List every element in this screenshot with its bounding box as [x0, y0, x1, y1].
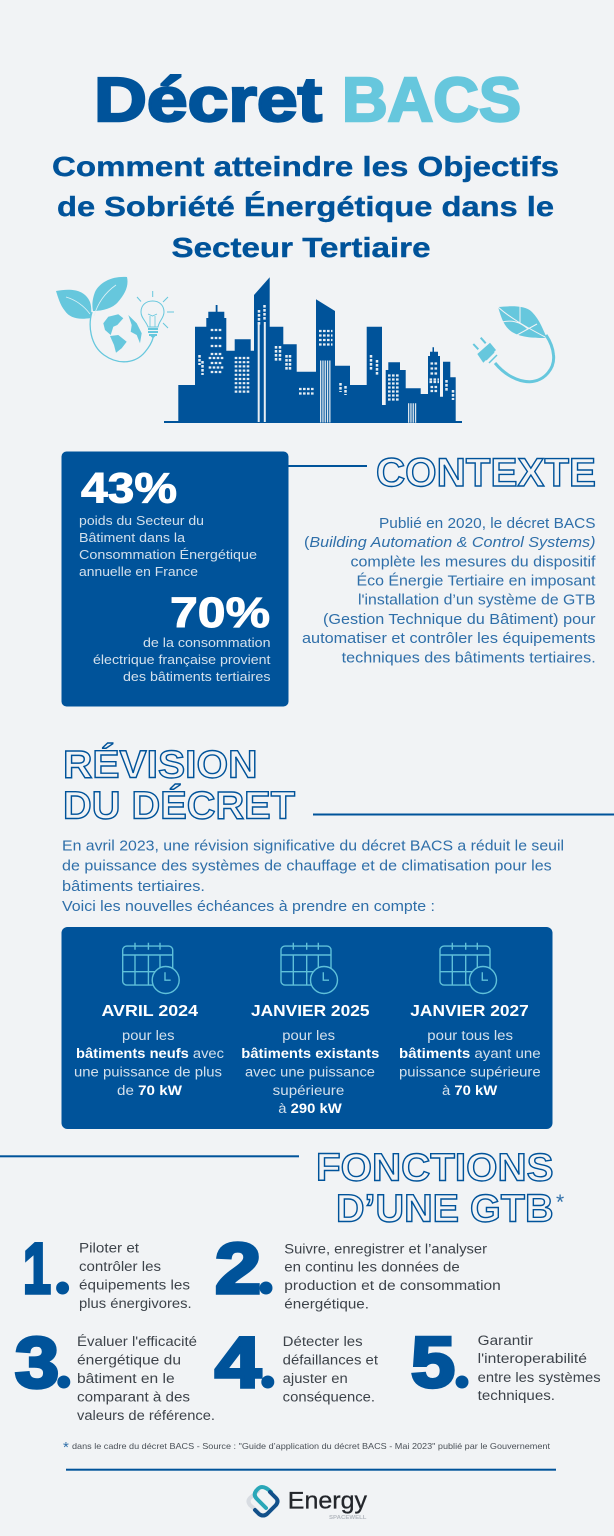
- item 4: 4: [215, 1324, 262, 1403]
- item 4: ajuster en: [283, 1371, 348, 1386]
- heading: révision du décret: RÉVISION: [63, 743, 258, 787]
- item 4: Détecter les: [283, 1334, 363, 1349]
- footnote: dans le cadre du décret BACS - Source : "Guide d’application du décret BACS - Mai 2023" publié par le Gouvernement: [72, 1441, 551, 1451]
- item 1: contrôler les: [79, 1259, 161, 1274]
- item 3: valeurs de référence.: [77, 1408, 215, 1423]
- asterisk: *: [556, 1191, 564, 1214]
- text: janvier 2025 details: pour les: [282, 1028, 335, 1043]
- icon: plug with leaf: [473, 306, 554, 382]
- item 2: en continu les données de: [284, 1260, 460, 1275]
- icon: calendar with clock: [281, 943, 338, 994]
- text: janvier 2027 details: puissance supérieure: [399, 1064, 541, 1080]
- item 5: [411, 1324, 601, 1403]
- column: janvier 2025: [241, 943, 379, 1116]
- text: 43% description: Consommation Énergétique: [79, 547, 257, 562]
- subtitle: Comment atteindre les Objectifs: [52, 151, 559, 182]
- item 1: 1: [23, 1230, 51, 1309]
- icon: calendar with clock: [123, 943, 179, 994]
- text: contexte paragraph: automatiser et contrôler les équipements: [302, 631, 596, 647]
- stat: 70%: 70%: [170, 589, 270, 637]
- item 4: conséquence.: [283, 1390, 375, 1405]
- footnote: *: [63, 1439, 69, 1456]
- item 5: entre les systèmes: [478, 1370, 601, 1385]
- text: contexte paragraph: Éco Énergie Tertiaire en imposant: [356, 572, 596, 589]
- text: contexte paragraph: complète les mesures du dispositif: [350, 554, 597, 570]
- text: avril 2024 details: bâtiments neufs avec: [76, 1046, 224, 1061]
- text: janvier 2027 details: bâtiments ayant une: [399, 1046, 541, 1061]
- item 3: 3: [15, 1324, 59, 1403]
- item 5: Garantir: [478, 1333, 534, 1348]
- text: 70% description: électrique française provient: [93, 653, 271, 667]
- text: janvier 2025 details: supérieure: [273, 1083, 344, 1098]
- item 1: Piloter et: [79, 1241, 139, 1256]
- text: contexte paragraph: (Gestion Technique du Bâtiment) pour: [323, 612, 596, 628]
- heading: révision du décret: [63, 743, 295, 827]
- date: janvier 2027: JANVIER 2027: [410, 1003, 529, 1020]
- text: janvier 2027 details: à 70 kW: [442, 1083, 498, 1098]
- footnote: [63, 1439, 551, 1456]
- text: avril 2024 details: pour les: [122, 1028, 175, 1043]
- icon: leaves, globe and light bulb: [56, 277, 174, 362]
- item 3: [15, 1324, 215, 1423]
- text: janvier 2027 details: pour tous les: [427, 1028, 513, 1043]
- heading: fonctions d'une GTB: FONCTIONS: [316, 1147, 554, 1190]
- item 2: Suivre, enregistrer et l’analyser: [284, 1241, 488, 1256]
- item 1: plus énergivores.: [79, 1296, 192, 1311]
- panel: deadlines: [62, 927, 552, 1129]
- panel: key figures: [62, 452, 288, 706]
- item 1: [23, 1230, 192, 1311]
- text: révision paragraph: de puissance des systèmes de chauffage et de climatisation pour les: [62, 859, 552, 875]
- item 1: équipements les: [79, 1278, 190, 1293]
- heading: fonctions d'une GTB: [316, 1147, 554, 1231]
- title: [94, 66, 521, 135]
- text: 43% description: Bâtiment dans la: [79, 531, 185, 545]
- stat: 43%: 43%: [81, 465, 177, 513]
- date: avril 2024: AVRIL 2024: [102, 1003, 198, 1020]
- title: Décret: [94, 66, 322, 135]
- item 3: bâtiment en le: [77, 1371, 175, 1386]
- text: 70% description: des bâtiments tertiaires: [123, 670, 270, 684]
- text: 43% description: poids du Secteur du: [79, 514, 204, 528]
- text: avril 2024 details: de 70 kW: [117, 1083, 182, 1098]
- item 4: [215, 1324, 378, 1405]
- text: contexte paragraph: Publié en 2020, le décret BACS: [379, 516, 596, 532]
- subtitle: [52, 151, 559, 263]
- text: janvier 2025 details: bâtiments existants: [241, 1046, 379, 1061]
- text: révision paragraph: [62, 839, 564, 915]
- text: révision paragraph: bâtiments tertiaires.: [62, 879, 205, 895]
- item 4: défaillances et: [283, 1352, 378, 1367]
- text: contexte paragraph: (Building Automation & Control Systems): [304, 535, 596, 551]
- text: janvier 2025 details: avec une puissance: [245, 1064, 375, 1080]
- subtitle: de Sobriété Énergétique dans le: [57, 191, 554, 222]
- column: janvier 2027: [399, 943, 541, 1098]
- text: janvier 2025 details: à 290 kW: [278, 1101, 342, 1116]
- icon: city skyline: [164, 277, 462, 423]
- heading: révision du décret: DU DÉCRET: [63, 783, 295, 827]
- text: 70% description: [93, 636, 271, 684]
- heading: contexte: CONTEXTE: [376, 451, 596, 495]
- item 3: Évaluer l'efficacité: [77, 1334, 197, 1349]
- text: révision paragraph: En avril 2023, une révision significative du décret BACS a réduit le seuil: [62, 839, 564, 855]
- item 2: énergétique.: [284, 1297, 369, 1312]
- item 5: techniques.: [478, 1388, 555, 1403]
- item 3: énergétique du: [77, 1352, 181, 1367]
- item 2: [215, 1230, 501, 1312]
- subtitle: Secteur Tertiaire: [172, 232, 430, 263]
- item 2: 2: [215, 1230, 261, 1309]
- text: 70% description: de la consommation: [143, 636, 271, 650]
- text: avril 2024 details: [74, 1028, 224, 1098]
- item 3: comparant à des: [77, 1390, 190, 1405]
- item 5: l'interoperabilité: [478, 1351, 587, 1366]
- logo: Energy Spacewell: [248, 1487, 367, 1521]
- icon: calendar with clock: [440, 943, 496, 994]
- text: contexte paragraph: techniques des bâtiments tertiaires.: [342, 650, 596, 666]
- item 2: production et de consommation: [284, 1278, 501, 1293]
- text: 43% description: [79, 514, 257, 579]
- date: janvier 2025: JANVIER 2025: [251, 1003, 370, 1020]
- text: janvier 2027 details: [399, 1028, 541, 1098]
- text: 43% description: annuelle en France: [79, 565, 198, 579]
- text: révision paragraph: Voici les nouvelles échéances à prendre en compte :: [62, 899, 435, 915]
- text: contexte paragraph: l'installation d’un système de GTB: [358, 593, 596, 609]
- heading: fonctions d'une GTB: D’UNE GTB: [336, 1188, 554, 1231]
- text: janvier 2025 details: [241, 1028, 379, 1116]
- item 5: 5: [411, 1324, 455, 1403]
- logo: Energy Spacewell: SPACEWELL: [329, 1515, 366, 1521]
- text: contexte paragraph: [302, 516, 597, 666]
- logo: Energy Spacewell: Energy: [288, 1488, 367, 1515]
- text: avril 2024 details: une puissance de plus: [74, 1064, 222, 1080]
- column: avril 2024: [74, 943, 224, 1098]
- title: BACS: [342, 66, 521, 135]
